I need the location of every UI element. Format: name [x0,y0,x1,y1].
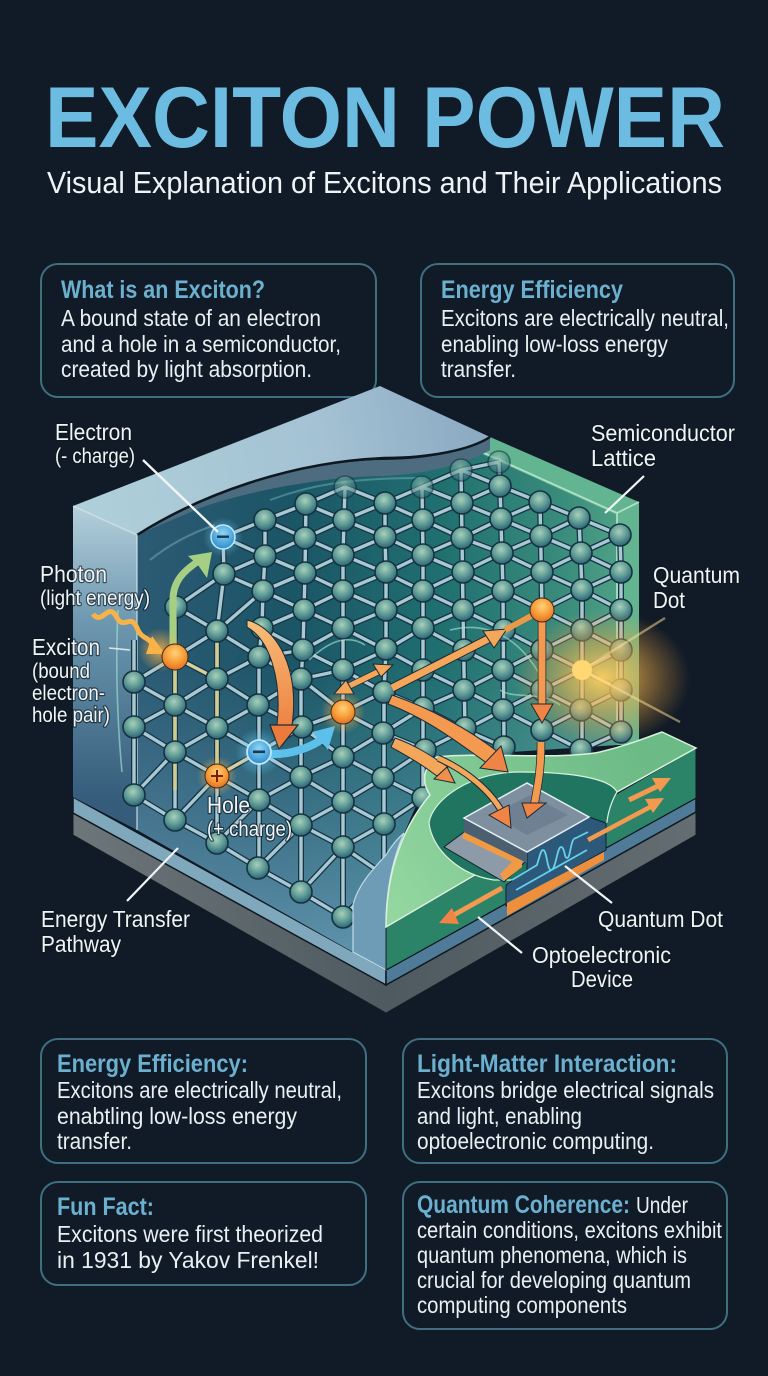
orange base strip [507,852,604,916]
arrow: double headed [334,664,393,694]
label: exciton: (bound [32,660,90,683]
text block: light-matter interaction [417,1077,714,1154]
label: exciton: hole pair) [32,704,110,727]
leader: optoelectronic device [478,917,522,953]
arrow: long diagonal to upper orange dot [392,610,542,688]
panel: fun fact [41,1182,366,1285]
text block: energy efficiency: Excitons are electrically neutral, [57,1077,342,1103]
front glass pillar [353,833,404,970]
text block: light-matter interaction: and light, enabling [417,1103,582,1129]
panel: energy efficiency bottom [41,1039,366,1163]
text block: energy efficiency: transfer. [57,1128,132,1154]
right green frame [480,437,639,745]
label: quantum dot upper [653,562,740,613]
text block: fun fact: in 1931 by Yakov Frenkel! [57,1247,319,1273]
heading: quantum coherence: Quantum Coherence: [417,1191,630,1219]
arrow: curved to plateau [391,738,455,783]
label: hole: Hole [207,792,250,818]
panel: quantum coherence [403,1182,727,1329]
heading: energy efficiency: Energy Efficiency: [57,1050,248,1078]
text block: fun fact [57,1221,323,1273]
exciton orange dot centre [321,690,365,734]
subtitle: Visual Explanation of Excitons and Their Applications [47,165,722,200]
chip left face [464,818,527,863]
arrow: thin curve to chip [438,758,511,828]
lattice atoms [123,451,632,928]
arrow: right outflow 2 [588,798,664,840]
label: photon: (light energy) [40,587,150,610]
quantum dot glow [514,610,690,746]
label: hole: (+ charge) [207,818,292,841]
label: electron: (- charge) [55,445,135,468]
electron icon top [203,517,243,557]
text block: exciton definition [61,305,341,382]
text block: quantum coherence: crucial for developing quantum [417,1267,691,1293]
text block: energy efficiency: enabling low-loss energy [441,331,668,357]
leader: semiconductor lattice [605,476,644,513]
arrow: curved to device 1 [388,695,508,772]
label: optoelectronic device: Optoelectronic [532,942,671,968]
label: exciton [32,634,110,727]
device chip [444,783,606,916]
exciton orange dot upper right [530,598,554,622]
label: energy transfer pathway: Energy Transfer [41,906,190,932]
heading: fun fact: Fun Fact: [57,1193,154,1221]
leader: quantum dot [565,866,612,903]
label: photon: Photon [40,561,107,587]
text block: quantum coherence: quantum phenomena, which is [417,1242,687,1268]
label: electron [55,419,135,468]
label: semiconductor lattice [591,420,735,471]
label: exciton: Exciton [32,634,100,660]
arrow: curved energy transfer down [247,620,298,749]
leader: exciton [109,648,130,650]
label: semiconductor lattice: Lattice [591,445,656,471]
text block: energy efficiency [57,1077,342,1154]
panel: energy efficiency top [421,264,734,397]
label: quantum dot upper: Quantum [653,562,740,588]
leader: energy transfer pathway [127,848,178,901]
quantum dot sparkle [572,660,592,680]
exciton orange dot left [162,644,188,670]
label: hole [207,792,292,841]
text block: exciton definition: created by light absorption. [61,356,312,382]
arrow: cyan electron flow [270,726,335,754]
title: EXCITON POWER [45,70,725,166]
chip top [464,783,589,852]
text block: fun fact: Excitons were first theorized [57,1221,323,1247]
interior wall [137,437,617,952]
text block: quantum coherence: computing components [417,1292,627,1318]
text block: light-matter interaction: optoelectronic computing. [417,1128,654,1154]
text block: quantum coherence [417,1192,723,1318]
arrow: green excitation path [173,552,212,647]
label: electron: Electron [55,419,132,445]
arrow: from lattice into chip [522,742,546,818]
pit around device [429,772,617,880]
base layer: right strip [386,798,696,985]
label: photon [40,561,150,610]
panel: what is an exciton [41,264,376,397]
text block: exciton definition: A bound state of an electron [61,305,321,331]
heading: light-matter interaction: Light-Matter Interaction: [417,1050,677,1078]
text block: exciton definition: and a hole in a semiconductor, [61,331,341,357]
arrow: right outflow 1 [629,778,671,800]
hole icon [197,756,237,796]
text block: energy efficiency: Excitons are electrically neutral, [441,305,729,331]
lattice bonds [134,462,621,917]
arrow: left outflow [439,888,502,924]
text block: quantum coherence: Under [636,1192,688,1218]
text block: energy efficiency [441,305,729,382]
chip right face [506,817,606,906]
thin energy wisps [117,610,560,772]
left outer wall [73,506,137,830]
base layer: grey [73,812,696,1013]
arrow: photon wave [93,611,182,672]
front green face [386,748,696,970]
electron icon lower [235,728,283,776]
top cap [73,386,490,830]
label: optoelectronic device [532,942,671,992]
label: quantum dot upper: Dot [653,587,686,613]
leader: electron [143,460,218,532]
heading: energy efficiency: Energy Efficiency [441,276,623,304]
label: energy transfer pathway: Pathway [41,931,121,957]
label: optoelectronic device: Device [571,966,633,992]
green plateau [386,732,696,927]
lattice block diagram [73,386,696,1013]
arrow: vertical from upper orange dot [531,610,553,723]
base layer: left strip [73,797,386,985]
label: exciton: electron- [32,682,105,705]
panel: light-matter interaction [403,1039,727,1163]
orange slab strip [462,832,522,881]
label: energy transfer pathway [41,906,190,957]
text block: energy efficiency: enabtling low-loss energy [57,1103,297,1129]
waveform [512,832,588,890]
chip left slab [444,832,527,882]
glow rays [582,618,680,722]
label: quantum dot lower: Quantum Dot [598,906,724,932]
text block: light-matter interaction: Excitons bridge electrical signals [417,1077,714,1103]
text block: energy efficiency: transfer. [441,356,516,382]
heading: what is an exciton: What is an Exciton? [61,276,265,304]
label: semiconductor lattice: Semiconductor [591,420,735,446]
text block: quantum coherence: certain conditions, excitons exhibit [417,1217,723,1243]
